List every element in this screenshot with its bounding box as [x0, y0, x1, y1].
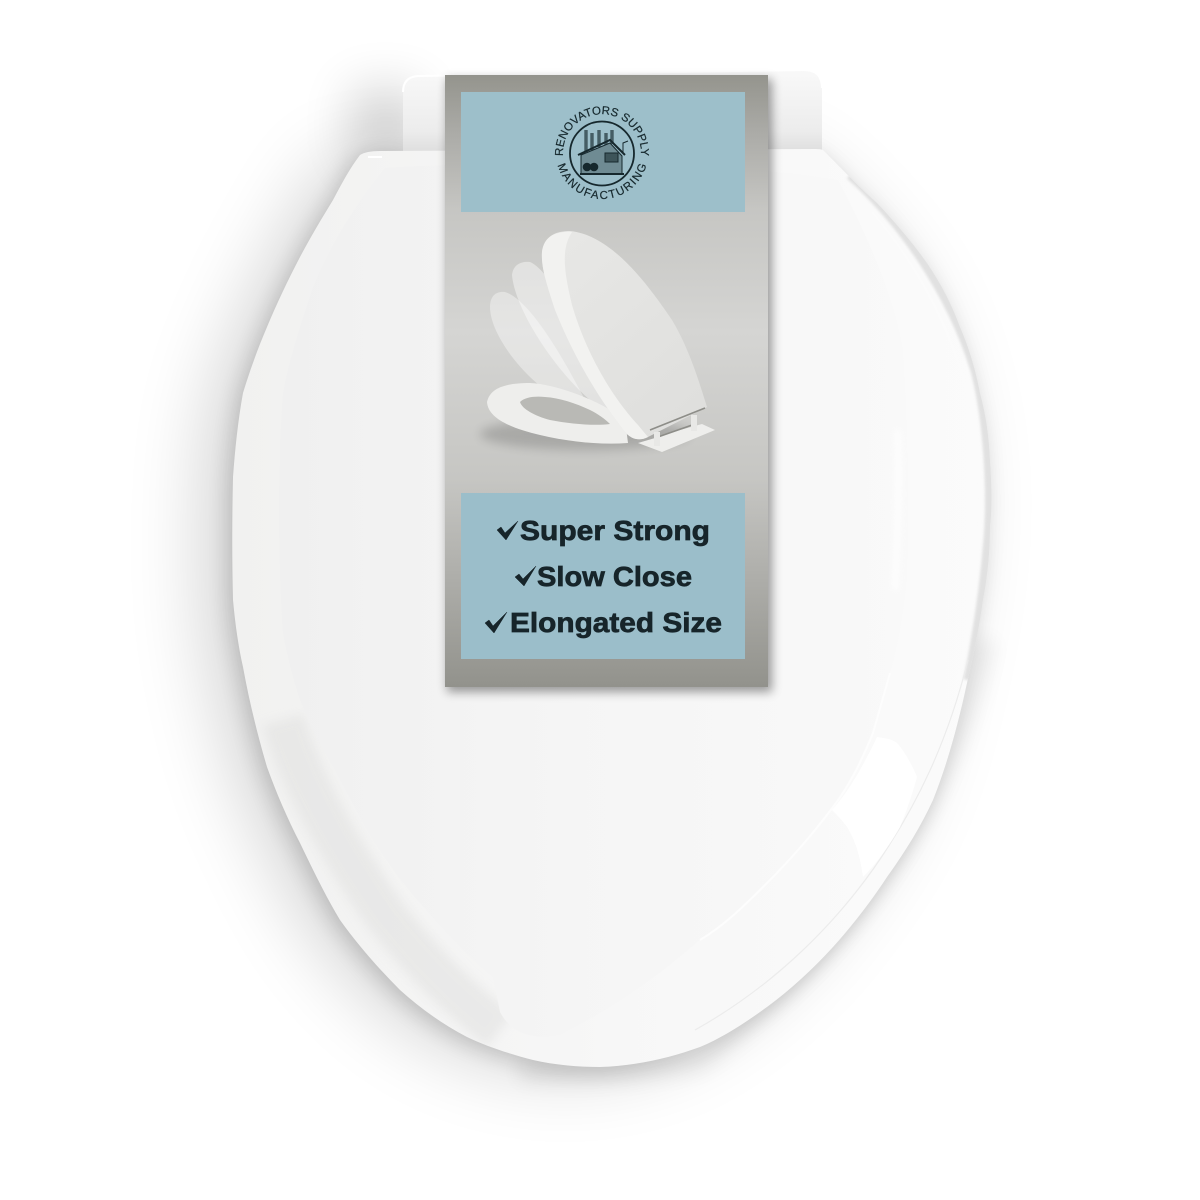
front lid [542, 231, 707, 439]
logo: Renovators Supply Manufacturing [554, 106, 650, 200]
top blue panel [461, 92, 745, 212]
lid edge [542, 232, 648, 439]
faint reflection [895, 430, 898, 590]
toilet seat lid [232, 149, 992, 1067]
card shadow [447, 79, 772, 692]
seat drop shadow [202, 85, 986, 1073]
seat rim [232, 149, 992, 1067]
ghost lid middle [512, 262, 625, 420]
mini toilet seat illustration [480, 231, 715, 452]
floor shadow [480, 418, 690, 450]
ghost lid far [490, 292, 590, 410]
card background [445, 75, 768, 687]
gloss highlight [832, 737, 917, 877]
lower right lip lines [695, 660, 968, 1030]
right edge lip shade [850, 175, 989, 680]
seat ring [487, 383, 628, 444]
logo house [578, 130, 628, 174]
seat hole [520, 397, 610, 425]
logo text top: RENOVATORS SUPPLY [554, 106, 650, 156]
hinge cover [403, 70, 822, 152]
feature list [485, 515, 722, 638]
bottom blue panel [461, 493, 745, 659]
right edge light line [872, 212, 979, 680]
hinge [638, 424, 715, 452]
product card [440, 72, 778, 698]
feature: Elongated Size: Elongated Size [510, 607, 722, 638]
inner lid panel [279, 163, 908, 1037]
feature: Super Strong: Super Strong [520, 515, 710, 546]
feature: Slow Close: Slow Close [537, 561, 692, 592]
panel highlight line [700, 673, 890, 940]
top corner glint [368, 156, 382, 158]
logo text bottom: MANUFACTURING [558, 163, 646, 200]
lower left band shade [283, 720, 500, 1030]
